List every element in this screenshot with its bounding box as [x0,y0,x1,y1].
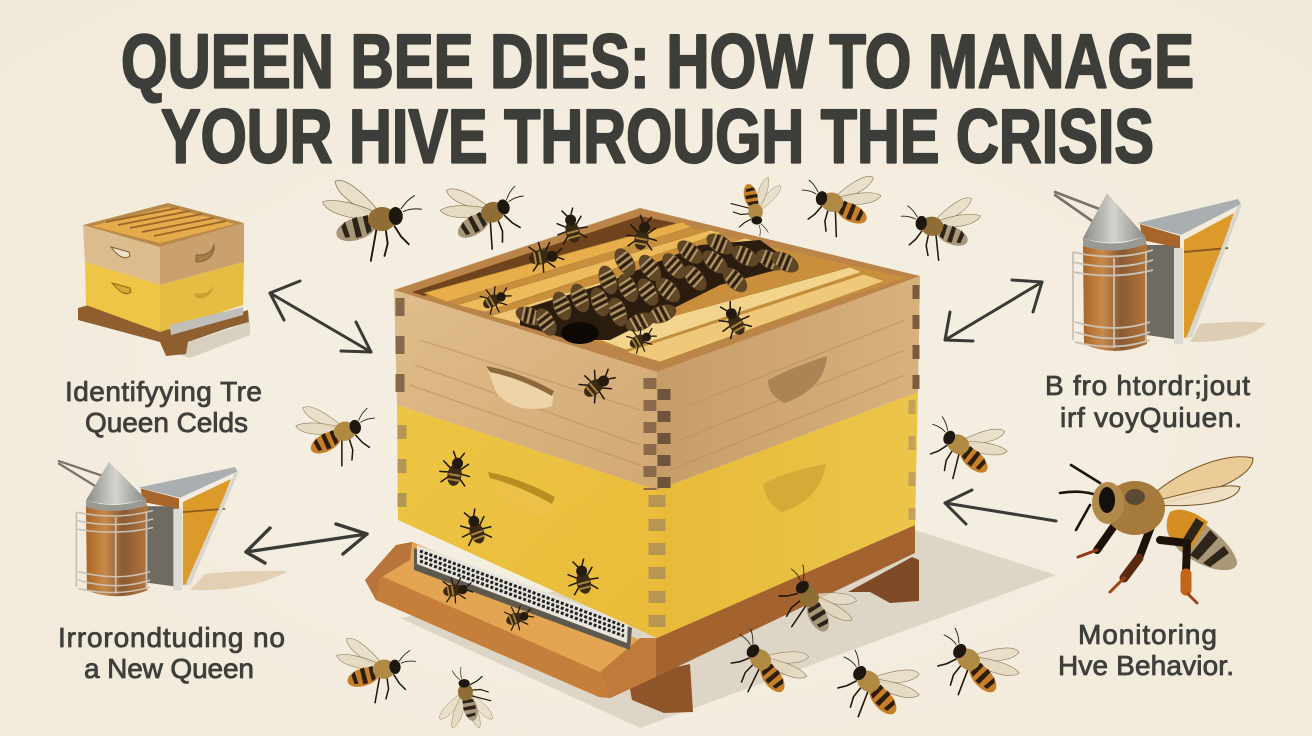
upper hand holds [486,366,554,409]
text: introducing a new queen: a New Queen [84,653,254,684]
finger joints [644,378,656,490]
text: introducing a new queen [58,622,285,684]
text: identifying queen cells: Identifyying Tre [65,376,262,407]
frames [424,222,885,362]
rim [394,208,920,372]
text: monitoring hive behavior: Hve Behavior. [1058,650,1234,681]
arrow: large bee to main hive [945,490,1056,524]
cluster of bees in hive [520,240,795,340]
text: top right garbled label: irf voyQuiuen. [1060,402,1242,433]
dark cavity [561,322,599,344]
hive shadow [400,530,1056,728]
arrow: main hive to smoker [945,280,1042,341]
flying bees [292,163,1029,736]
lower hand holds [488,472,555,515]
text: introducing a new queen: Irrorondtuding no [58,622,285,653]
text: monitoring hive behavior: Monitoring [1078,619,1217,650]
text: top right garbled label: B fro htordr;jout [1045,370,1250,401]
text: top right garbled label [1045,370,1250,433]
large bee [1060,457,1253,603]
crawling bees on hive [438,206,755,633]
hive feet [628,664,693,713]
arrow: smoker to main hive [246,524,367,563]
arrow: hive icon to main hive [270,281,371,352]
title [121,20,1194,180]
main hive [365,208,1056,728]
small hive icon top left [78,203,250,358]
landing board [599,525,915,698]
upper wood box [394,290,657,490]
smoker lower left [59,461,288,596]
entrance screen [414,548,632,650]
text: identifying queen cells [65,376,262,438]
smoker top right [1055,192,1266,351]
lower yellow box [397,405,657,638]
text: identifying queen cells: Queen Celds [85,407,248,438]
text: monitoring hive behavior [1058,619,1234,681]
